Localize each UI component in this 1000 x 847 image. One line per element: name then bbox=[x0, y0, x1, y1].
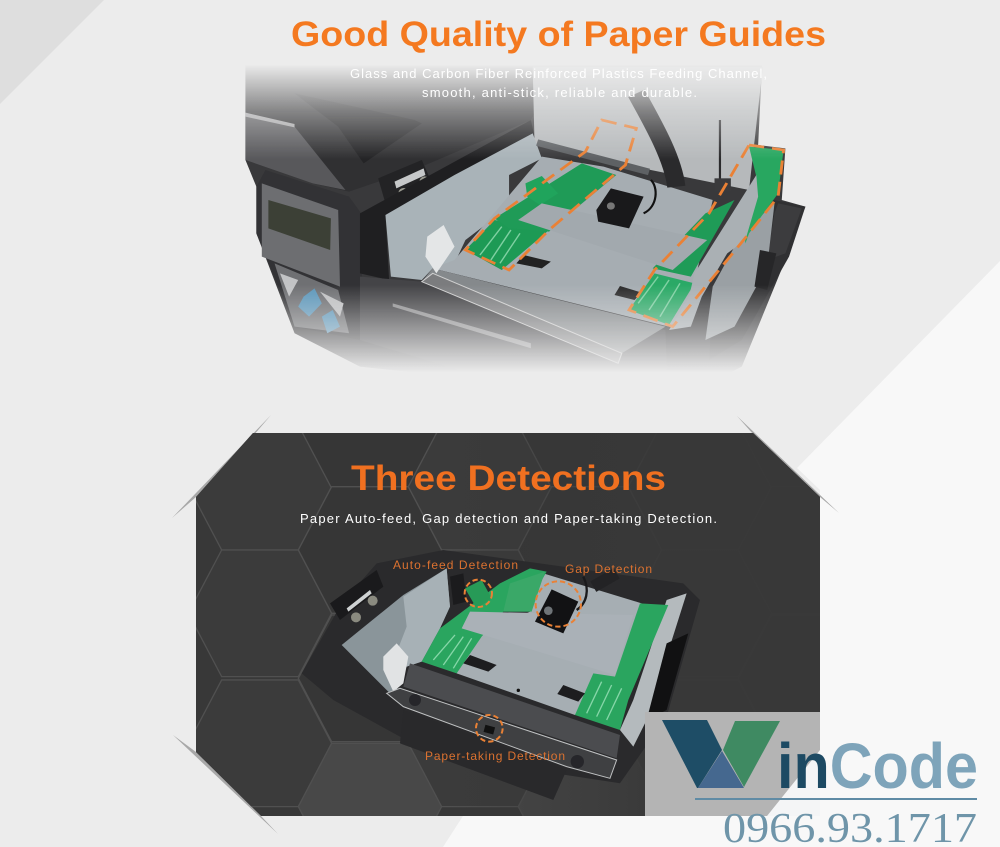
printer dark backing bbox=[302, 550, 700, 783]
logo mark bbox=[662, 720, 780, 788]
subtitle: paper guides bbox=[350, 66, 767, 100]
paper plate bbox=[518, 203, 707, 270]
hinge bbox=[330, 570, 383, 622]
logo wordmark: inCode bbox=[777, 730, 978, 802]
label: gap detection: Gap Detection bbox=[565, 562, 652, 576]
white tab and clear strip bbox=[422, 225, 642, 363]
printer front and dark frame bbox=[360, 120, 534, 348]
slots and white tab bbox=[383, 643, 585, 702]
title: three detections: Three Detections bbox=[351, 459, 666, 498]
title: good quality: Good Quality of Paper Guides bbox=[291, 15, 826, 54]
printer photo: paper guides bbox=[245, 68, 806, 369]
subtitle: three detections: Paper Auto-feed, Gap detection and Paper-taking Detection. bbox=[300, 511, 717, 526]
hexagon background pattern bbox=[196, 433, 820, 816]
green paper guides bbox=[465, 147, 784, 325]
label: paper-taking detection: Paper-taking Detection bbox=[425, 749, 565, 763]
green guide ribs bbox=[480, 227, 680, 317]
frame plates bbox=[342, 568, 688, 747]
sensor block bbox=[535, 573, 617, 633]
watermark backdrop bbox=[645, 712, 820, 816]
panel: three detections bbox=[196, 433, 820, 816]
logo rule bbox=[695, 798, 977, 800]
right side dark bracket bbox=[706, 200, 806, 340]
watermark logo bbox=[662, 720, 978, 847]
metal frame plates bbox=[385, 67, 763, 353]
printer top cover bbox=[245, 97, 472, 200]
orange dashed detection circles bbox=[465, 580, 581, 742]
control panel body bbox=[256, 184, 349, 334]
orange dashed guide outlines bbox=[465, 120, 784, 327]
printer photo: detection points bbox=[302, 550, 700, 800]
front dark strip bbox=[387, 663, 620, 800]
green guide ribs bbox=[433, 635, 622, 720]
printer backing bbox=[245, 80, 806, 369]
subtitle: paper guides: Glass and Carbon Fiber Reinforced Plastics Feeding Channel, bbox=[350, 66, 767, 81]
guide rod and cable bbox=[536, 93, 731, 192]
sensor block bbox=[596, 180, 656, 228]
subtitle: paper guides: smooth, anti-stick, reliable and durable. bbox=[422, 85, 697, 100]
paper plate bbox=[462, 612, 633, 675]
corner light streaks bbox=[172, 415, 839, 834]
label: auto-feed detection: Auto-feed Detection bbox=[393, 558, 518, 572]
green paper guides bbox=[422, 568, 668, 730]
right side plate bbox=[669, 175, 758, 330]
